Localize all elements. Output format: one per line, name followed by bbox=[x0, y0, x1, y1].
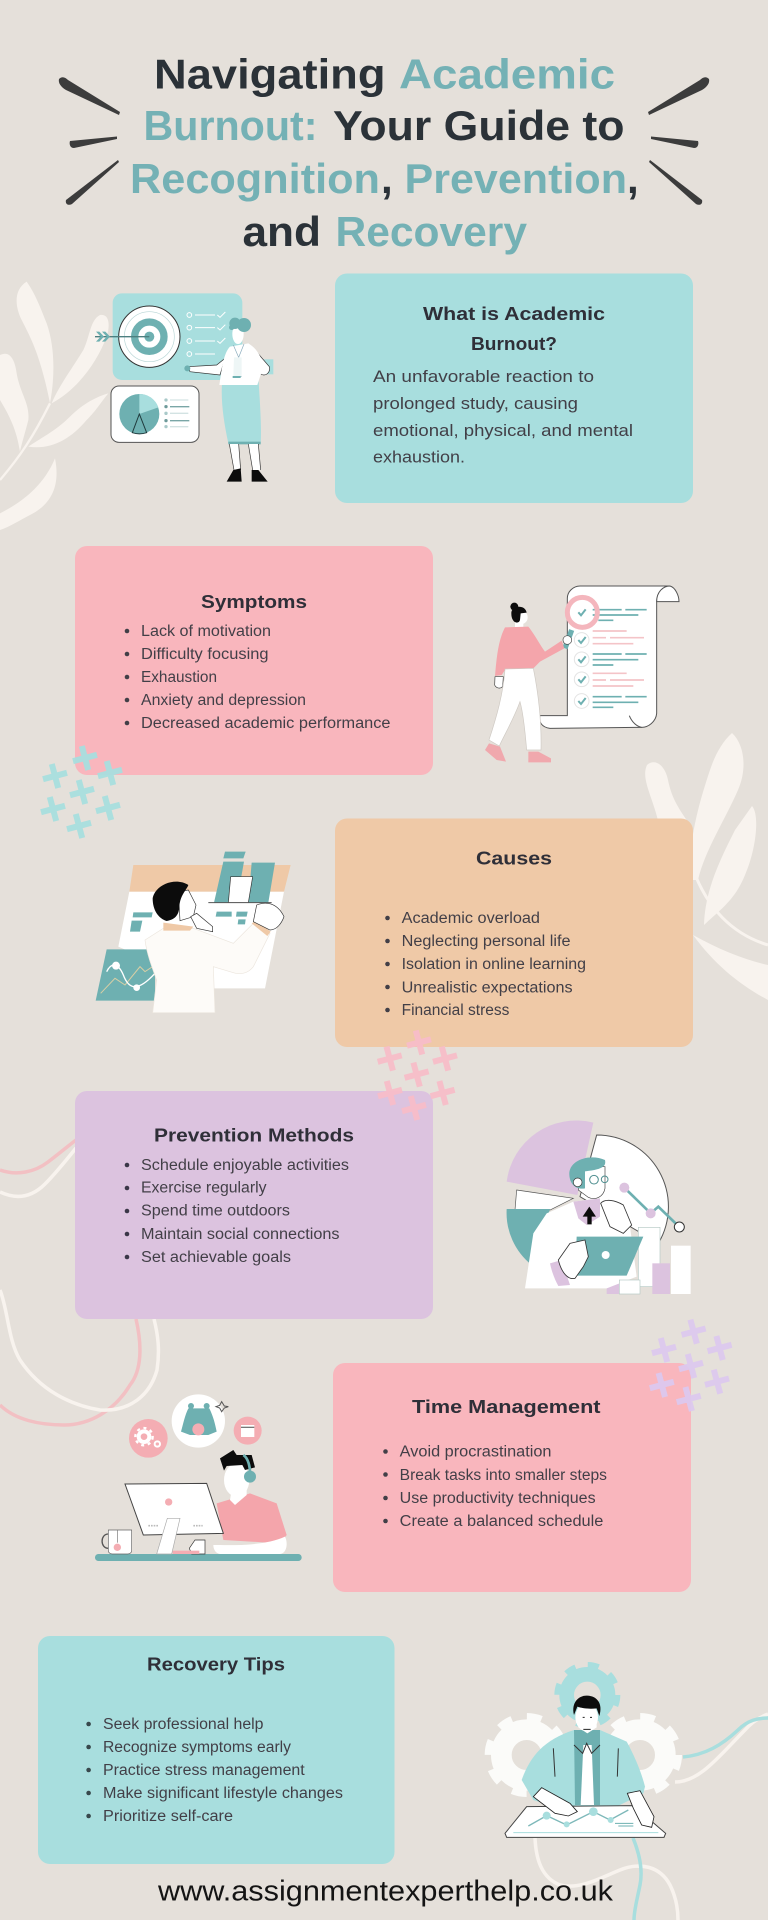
bullet list: Exhaustion bbox=[141, 669, 217, 686]
scroll bbox=[540, 586, 679, 728]
bullet list bbox=[125, 1157, 349, 1266]
heading: Prevention Methods bbox=[154, 1125, 354, 1146]
bullet list: Isolation in online learning bbox=[402, 956, 586, 973]
bullet list bbox=[86, 1716, 343, 1825]
title bbox=[130, 51, 639, 255]
heading: Symptoms bbox=[201, 591, 307, 612]
figure: man bbox=[525, 1157, 643, 1294]
bullet list: Make significant lifestyle changes bbox=[103, 1785, 343, 1802]
bar chart bbox=[208, 852, 275, 903]
bullet list: Anxiety and depression bbox=[141, 692, 306, 709]
bullet list: Spend time outdoors bbox=[141, 1203, 290, 1220]
checklist bbox=[187, 312, 225, 356]
illustration: woman presenting target and pie chart bbox=[95, 293, 273, 482]
icon: right white gear bbox=[602, 1717, 678, 1793]
card: pie chart bbox=[111, 386, 199, 442]
bullet list: Neglecting personal life bbox=[402, 933, 571, 950]
panel: symptoms bbox=[75, 546, 433, 775]
decorative leaf: top left bbox=[0, 282, 109, 530]
bullet list: Create a balanced schedule bbox=[400, 1513, 603, 1530]
icon: gears badge bbox=[129, 1419, 168, 1458]
bullet list: Decreased academic performance bbox=[141, 715, 390, 732]
body text: prolonged study, causing bbox=[373, 394, 578, 413]
illustration: woman inspecting checklist scroll bbox=[485, 586, 679, 762]
heading: Causes bbox=[476, 848, 552, 869]
icon: magnifier bbox=[565, 597, 597, 648]
bullet list: Maintain social connections bbox=[141, 1226, 340, 1243]
illustration: man studying charts bbox=[96, 852, 291, 1013]
bullet list: Use productivity techniques bbox=[400, 1490, 596, 1507]
bullet list bbox=[125, 623, 390, 732]
heading: What is Academic bbox=[423, 303, 605, 324]
desk bbox=[95, 1554, 302, 1561]
bullet list: Seek professional help bbox=[103, 1716, 264, 1733]
title: Recovery bbox=[336, 208, 528, 255]
pie sectors bbox=[507, 1121, 668, 1265]
bullet list: Academic overload bbox=[402, 910, 540, 927]
icon: left white gear bbox=[489, 1717, 565, 1793]
burst strokes around title bbox=[59, 77, 709, 205]
figure: woman bbox=[184, 318, 273, 482]
hands bbox=[533, 1788, 654, 1827]
icon: target bbox=[95, 306, 180, 367]
decorative curves: left bbox=[0, 1140, 158, 1425]
figure: woman bbox=[485, 603, 572, 762]
bullet list bbox=[383, 1444, 607, 1530]
panel: time management bbox=[333, 1363, 691, 1592]
figure: man bbox=[145, 882, 284, 1013]
body text bbox=[373, 367, 633, 466]
bullet list bbox=[385, 910, 586, 1019]
title: and bbox=[242, 208, 321, 255]
body text: An unfavorable reaction to bbox=[373, 367, 594, 386]
computer monitor bbox=[125, 1483, 223, 1554]
title: , bbox=[381, 155, 393, 202]
line chart bbox=[619, 1183, 684, 1232]
bullet list: Set achievable goals bbox=[141, 1249, 291, 1266]
bullet list: Break tasks into smaller steps bbox=[400, 1467, 607, 1484]
panel: causes bbox=[335, 818, 693, 1047]
bullet list: Unrealistic expectations bbox=[402, 980, 573, 996]
calendar board bbox=[118, 865, 291, 988]
bullet list: Exercise regularly bbox=[141, 1180, 267, 1197]
title: Academic bbox=[399, 51, 615, 98]
bullet list: Avoid procrastination bbox=[400, 1444, 552, 1461]
bullet list: Financial stress bbox=[402, 1002, 510, 1019]
bullet list: Schedule enjoyable activities bbox=[141, 1157, 349, 1174]
illustration: man with tablet and pie chart bbox=[507, 1121, 691, 1294]
plus cluster: pink bbox=[378, 1030, 457, 1120]
decorative curves: bottom right bbox=[535, 1714, 768, 1920]
small bars bbox=[607, 1227, 691, 1294]
bullet list: Practice stress management bbox=[103, 1762, 305, 1779]
title: , bbox=[627, 155, 639, 202]
line chart card bbox=[96, 949, 155, 1001]
icon: calendar badge bbox=[234, 1417, 262, 1445]
panel: what is academic burnout bbox=[335, 274, 693, 503]
bullet list: Prioritize self-care bbox=[103, 1808, 233, 1825]
decorative leaf: right bbox=[645, 733, 768, 1000]
bullet list: Lack of motivation bbox=[141, 623, 271, 640]
plus cluster: lilac bbox=[650, 1320, 732, 1411]
title: Navigating bbox=[154, 51, 386, 98]
illustration: man at drafting table with gears bbox=[489, 1665, 678, 1837]
title: Recognition bbox=[130, 155, 380, 202]
drafting table bbox=[505, 1806, 666, 1837]
bullet list: Difficulty focusing bbox=[141, 646, 268, 663]
bullet list: Recognize symptoms early bbox=[103, 1739, 291, 1756]
panel: recovery tips bbox=[38, 1636, 394, 1864]
mug bbox=[102, 1530, 132, 1554]
title: Your Guide to bbox=[333, 102, 624, 149]
heading: Time Management bbox=[412, 1396, 600, 1417]
body text: exhaustion. bbox=[373, 448, 465, 466]
title: Prevention bbox=[404, 155, 627, 202]
heading: Recovery Tips bbox=[147, 1654, 285, 1675]
illustration: man at computer with headphones bbox=[95, 1394, 302, 1561]
heading: Burnout? bbox=[471, 333, 557, 354]
figure: man bbox=[522, 1696, 645, 1807]
heading bbox=[423, 303, 605, 354]
title: Burnout: bbox=[144, 102, 318, 149]
icon: teal gear bbox=[558, 1665, 617, 1725]
panel: prevention methods bbox=[75, 1091, 433, 1319]
figure: man bbox=[189, 1450, 287, 1554]
footer website url: www.assignmentexperthelp.co.uk bbox=[157, 1876, 614, 1908]
icon: frog badge bbox=[172, 1394, 228, 1448]
plus cluster: teal bbox=[41, 746, 122, 838]
body text: emotional, physical, and mental bbox=[373, 421, 633, 440]
